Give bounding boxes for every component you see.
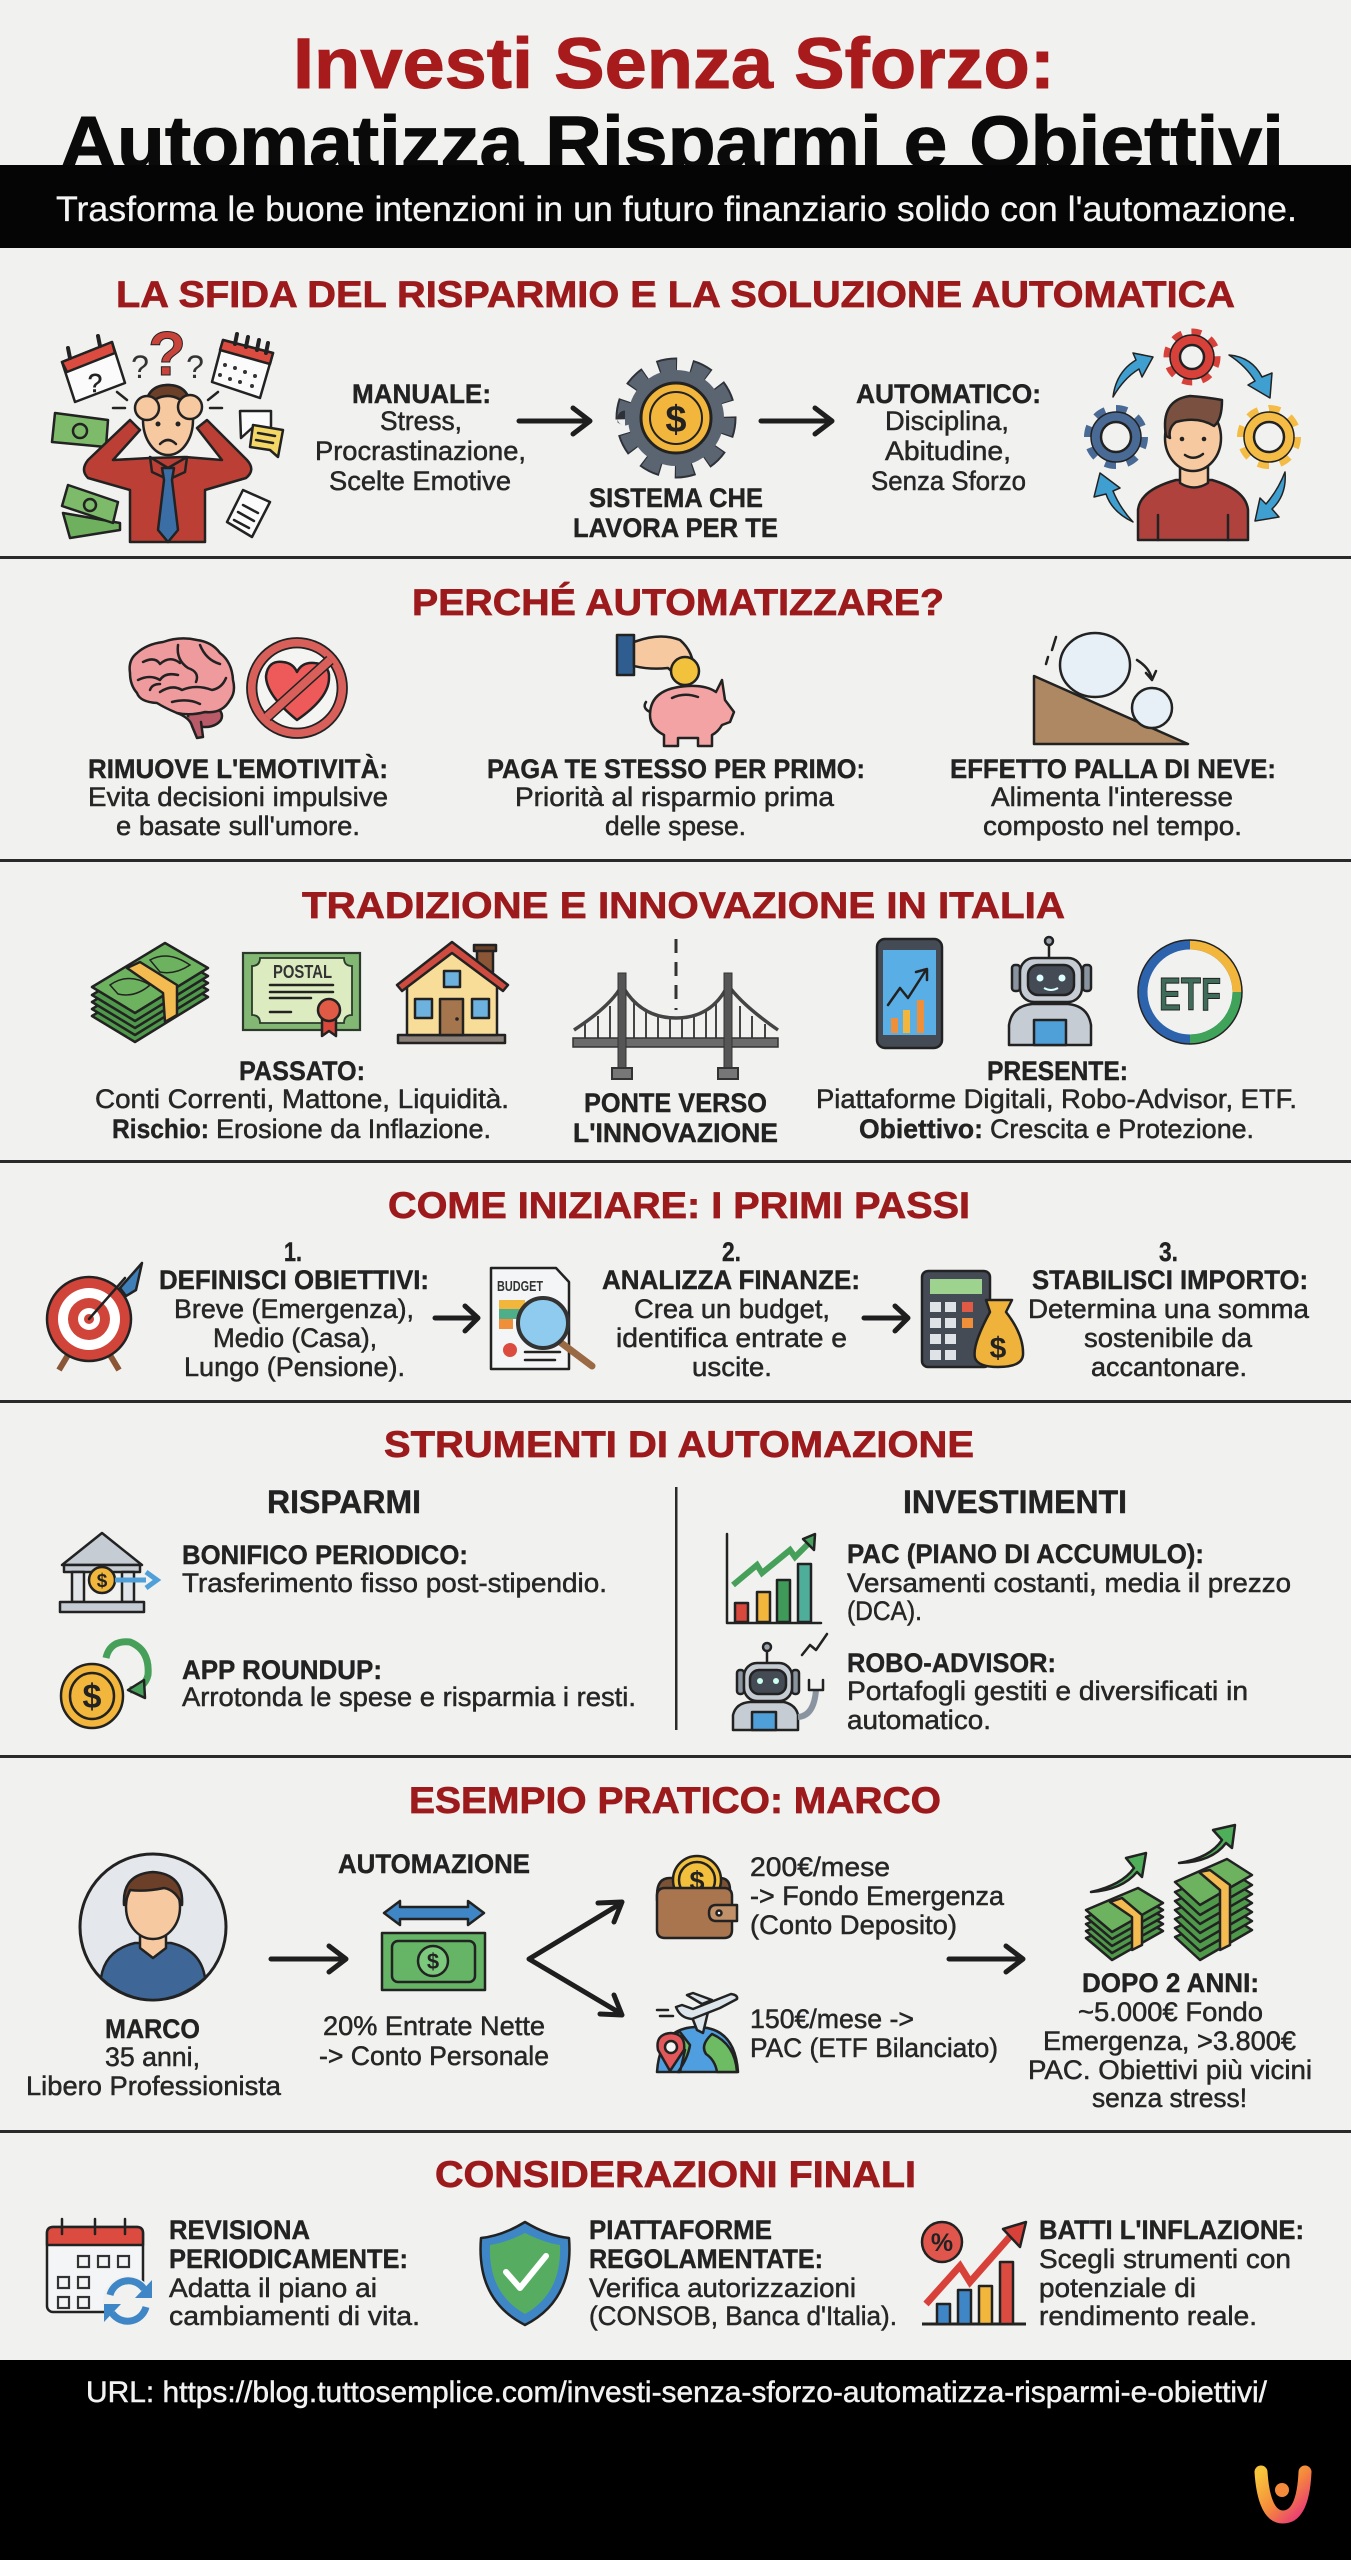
text: pac: (DCA). xyxy=(847,1596,922,1626)
icon: calculator and money bag: $ xyxy=(990,1332,1007,1365)
icon: target xyxy=(47,1263,142,1370)
text: robo-advisor: Portafogli gestiti e diversificati in xyxy=(847,1676,1248,1706)
text: bonifico: BONIFICO PERIODICO: xyxy=(182,1540,468,1570)
text: step 1 xyxy=(159,1237,429,1382)
text: piattaforme: PIATTAFORME xyxy=(589,2215,772,2245)
icon: hand and piggy xyxy=(617,635,734,746)
icon: ETF ring xyxy=(1138,940,1242,1044)
text: ponte xyxy=(573,1088,778,1148)
arrow: fork xyxy=(529,1902,622,2015)
icon: shield xyxy=(481,2222,569,2325)
text: manuale: Scelte Emotive xyxy=(329,466,511,496)
text: step 3 xyxy=(1028,1237,1310,1382)
text: dopo 2 anni: PAC. Obiettivi più vicini xyxy=(1028,2055,1312,2085)
text: pac: PAC (PIANO DI ACCUMULO): xyxy=(847,1539,1204,1569)
icon: postal certificate xyxy=(243,953,360,1036)
icon: marco avatar xyxy=(80,1854,226,2000)
text: step 2: ANALIZZA FINANZE: xyxy=(602,1265,860,1295)
icon: calendar with sync xyxy=(47,2219,153,2326)
text: rimuove: RIMUOVE L'EMOTIVITÀ: xyxy=(88,753,388,784)
panel: perche automatizzare xyxy=(88,582,1276,841)
text: step 1: Medio (Casa), xyxy=(213,1323,377,1353)
icon: stressed man: ? xyxy=(88,368,102,398)
text: passato: PASSATO: xyxy=(239,1056,365,1086)
text: robo-advisor: automatico. xyxy=(847,1705,991,1735)
icon: money stack xyxy=(92,943,208,1042)
text: dopo 2 anni: Emergenza, >3.800€ xyxy=(1043,2026,1296,2056)
panel: la sfida xyxy=(52,274,1297,543)
text: step 2 xyxy=(602,1237,860,1382)
text: automatico: AUTOMATICO: xyxy=(856,379,1041,409)
text: effetto: EFFETTO PALLA DI NEVE: xyxy=(950,754,1276,784)
icon: phone xyxy=(877,939,942,1048)
heading: ESEMPIO PRATICO: MARCO xyxy=(409,1780,941,1821)
text: automatico: Abitudine, xyxy=(885,436,1011,466)
text: marco: MARCO xyxy=(105,2014,200,2044)
text: revisiona xyxy=(169,2215,420,2331)
text: pac xyxy=(847,1539,1291,1626)
text: step 3: STABILISCI IMPORTO: xyxy=(1032,1265,1308,1295)
text: 200: (Conto Deposito) xyxy=(750,1910,957,1940)
text: dopo 2 anni: DOPO 2 ANNI: xyxy=(1082,1968,1259,1998)
text: step 2: uscite. xyxy=(692,1352,772,1382)
icon: stressed man: ? xyxy=(148,320,186,389)
panel: come iniziare xyxy=(47,1185,1310,1382)
text: entrate xyxy=(319,2011,549,2071)
text: batti inflazione: Scegli strumenti con xyxy=(1039,2244,1291,2274)
icon: budget document: BUDGET xyxy=(497,1278,543,1295)
heading: risparmi: RISPARMI xyxy=(267,1484,421,1520)
text: manuale: Stress, xyxy=(380,406,462,436)
subtitle band xyxy=(0,165,1351,248)
icon: gear with coin xyxy=(624,366,728,470)
text: 200 xyxy=(750,1852,1005,1940)
text: batti inflazione: potenziale di xyxy=(1039,2273,1196,2303)
text: revisiona: Adatta il piano ai xyxy=(169,2273,377,2303)
text: entrate: -> Conto Personale xyxy=(319,2041,549,2071)
text: presente xyxy=(816,1056,1297,1144)
text: batti inflazione xyxy=(1039,2215,1304,2331)
text: passato: Conti Correnti, Mattone, Liquidità. xyxy=(95,1084,509,1114)
text: automatico: Disciplina, xyxy=(885,406,1009,436)
icon: wallet: $ xyxy=(689,1866,705,1896)
divider xyxy=(0,1755,1351,1758)
text: marco xyxy=(26,2014,282,2101)
text: revisiona: REVISIONA xyxy=(169,2215,310,2245)
icon: bank xyxy=(60,1533,157,1612)
text: revisiona: cambiamenti di vita. xyxy=(169,2301,420,2331)
icon: postal certificate: POSTAL xyxy=(273,962,332,982)
text: automatico: Senza Sforzo xyxy=(871,466,1026,496)
text: step 3: accantonare. xyxy=(1091,1352,1247,1382)
text: sistema: SISTEMA CHE xyxy=(589,483,763,513)
arrow xyxy=(761,408,832,434)
text: effetto xyxy=(950,754,1276,841)
text: effetto: Alimenta l'interesse xyxy=(991,782,1233,812)
text: manuale xyxy=(315,379,526,496)
icon: bridge xyxy=(573,939,778,1079)
divider xyxy=(0,556,1351,559)
title: Investi Senza Sforzo: xyxy=(293,25,1055,104)
text: passato: Erosione da Inflazione. xyxy=(216,1114,491,1144)
text: step 3: 3. xyxy=(1159,1237,1178,1267)
divider xyxy=(0,859,1351,862)
subtitle band: Trasforma le buone intenzioni in un futuro finanziario solido con l'automazione. xyxy=(56,190,1297,229)
text: presente: PRESENTE: xyxy=(987,1056,1128,1086)
arrow xyxy=(519,408,590,434)
arrow xyxy=(949,1946,1023,1972)
panel: tradizione e innovazione xyxy=(92,885,1297,1148)
icon: ETF ring: ETF xyxy=(1159,968,1221,1020)
footer url: URL: https://blog.tuttosemplice.com/investi-senza-sforzo-automatizza-risparmi-e-obiettivi/ xyxy=(86,2376,1268,2409)
icon: wallet xyxy=(657,1856,737,1938)
text: manuale: Procrastinazione, xyxy=(315,436,526,466)
panel: esempio pratico xyxy=(26,1780,1312,2113)
text: robo-advisor xyxy=(847,1648,1248,1735)
icon: budget document xyxy=(491,1268,592,1369)
icon: stressed man: ? xyxy=(186,349,204,385)
footer band xyxy=(0,2360,1351,2560)
heading: investimenti: INVESTIMENTI xyxy=(903,1484,1127,1520)
text: automazione: AUTOMAZIONE xyxy=(338,1849,530,1879)
icon: robo advisor xyxy=(733,1634,827,1730)
divider xyxy=(0,2130,1351,2133)
icon: calculator and money bag xyxy=(922,1271,1023,1367)
text: effetto: composto nel tempo. xyxy=(983,811,1242,841)
text: step 3: sostenibile da xyxy=(1084,1323,1253,1353)
text: paga: Priorità al risparmio prima xyxy=(515,782,835,812)
text: dopo 2 anni xyxy=(1028,1968,1312,2113)
text: robo-advisor: ROBO-ADVISOR: xyxy=(847,1648,1056,1678)
icon: robot xyxy=(1009,937,1091,1045)
icon: growth chart xyxy=(727,1534,821,1623)
icon: bank: $ xyxy=(97,1571,108,1592)
arrow xyxy=(271,1946,346,1972)
text: revisiona: PERIODICAMENTE: xyxy=(169,2244,408,2274)
text: piattaforme xyxy=(589,2215,897,2331)
text: step 3: Determina una somma xyxy=(1028,1294,1310,1324)
icon: exchange arrows and banknote: $ xyxy=(427,1949,439,1974)
icon: house xyxy=(397,942,508,1043)
icon: exchange arrows and banknote xyxy=(382,1901,485,1990)
text: manuale: MANUALE: xyxy=(352,379,491,409)
text: piattaforme: (CONSOB, Banca d'Italia). xyxy=(589,2301,897,2331)
text: step 2: Crea un budget, xyxy=(634,1294,830,1324)
text: step 1: DEFINISCI OBIETTIVI: xyxy=(159,1265,429,1295)
heading: LA SFIDA DEL RISPARMIO E LA SOLUZIONE AUTOMATICA xyxy=(116,274,1235,315)
heading: COME INIZIARE: I PRIMI PASSI xyxy=(388,1185,970,1226)
icon: stressed man: ? xyxy=(131,349,149,385)
text: 150: 150€/mese -> xyxy=(750,2004,914,2034)
text: bonifico xyxy=(182,1540,607,1598)
text: 200: 200€/mese xyxy=(750,1852,890,1882)
text: ponte: PONTE VERSO xyxy=(584,1088,767,1118)
text: sistema xyxy=(573,483,778,543)
text: app roundup: APP ROUNDUP: xyxy=(182,1655,382,1685)
text: automatico xyxy=(856,379,1041,496)
text: dopo 2 anni: senza stress! xyxy=(1092,2083,1247,2113)
text: ponte: L'INNOVAZIONE xyxy=(573,1118,778,1148)
text: batti inflazione: rendimento reale. xyxy=(1039,2301,1257,2331)
icon: inflation chart xyxy=(922,2222,1026,2324)
text: piattaforme: REGOLAMENTATE: xyxy=(589,2244,823,2274)
text: piattaforme: Verifica autorizzazioni xyxy=(589,2273,856,2303)
text: 200: -> Fondo Emergenza xyxy=(750,1881,1005,1911)
heading: PERCHÉ AUTOMATIZZARE? xyxy=(412,582,944,623)
text: paga: PAGA TE STESSO PER PRIMO: xyxy=(487,754,865,784)
text: dopo 2 anni: ~5.000€ Fondo xyxy=(1078,1997,1263,2027)
text: 150 xyxy=(750,2004,998,2063)
text: presente: Piattaforme Digitali, Robo-Advisor, ETF. xyxy=(816,1084,1297,1114)
heading: STRUMENTI DI AUTOMAZIONE xyxy=(384,1424,974,1465)
text: paga: delle spese. xyxy=(605,811,746,841)
icon: gear with coin: $ xyxy=(665,399,687,441)
text: presente: Crescita e Protezione. xyxy=(990,1114,1254,1144)
text: app roundup: Arrotonda le spese e risparmia i resti. xyxy=(182,1682,636,1712)
divider xyxy=(0,1160,1351,1163)
arrow xyxy=(435,1306,478,1331)
icon: globe and plane xyxy=(657,1993,738,2072)
text: 150: PAC (ETF Bilanciato) xyxy=(750,2033,998,2063)
text: step 1: 1. xyxy=(284,1237,302,1267)
panel: strumenti di automazione xyxy=(60,1424,1291,1735)
title xyxy=(60,25,1284,184)
text: step 2: identifica entrate e xyxy=(616,1323,847,1353)
logo xyxy=(1261,2472,1305,2517)
text: batti inflazione: BATTI L'INFLAZIONE: xyxy=(1039,2215,1304,2245)
text: passato: Rischio: xyxy=(112,1114,209,1144)
arrow xyxy=(864,1306,908,1331)
icon: inflation chart: % xyxy=(931,2229,953,2257)
text: entrate: 20% Entrate Nette xyxy=(323,2011,545,2041)
icon: brain and no heart xyxy=(130,638,347,738)
title: Automatizza Risparmi e Obiettivi xyxy=(60,101,1284,184)
divider xyxy=(0,1400,1351,1403)
icon: stressed man xyxy=(52,320,283,542)
panel: considerazioni finali xyxy=(47,2154,1304,2331)
text: step 1: Breve (Emergenza), xyxy=(174,1294,414,1324)
icon: coin with arrow: $ xyxy=(83,1678,102,1716)
text: paga xyxy=(487,754,865,841)
icon: growing money stacks xyxy=(1086,1825,1252,1960)
text: bonifico: Trasferimento fisso post-stipendio. xyxy=(182,1568,607,1598)
text: passato xyxy=(95,1056,509,1144)
text: pac: Versamenti costanti, media il prezzo xyxy=(847,1568,1291,1598)
text: step 1: Lungo (Pensione). xyxy=(184,1352,405,1382)
icon: snowball xyxy=(1034,633,1188,744)
text: marco: Libero Professionista xyxy=(26,2071,282,2101)
text: app roundup xyxy=(182,1655,636,1712)
text: rimuove xyxy=(88,753,388,841)
icon: person with gears xyxy=(1088,332,1297,540)
text: rimuove: e basate sull'umore. xyxy=(116,811,360,841)
text: presente: Obiettivo: xyxy=(859,1114,983,1144)
icon: coin with arrow xyxy=(61,1642,148,1728)
text: marco: 35 anni, xyxy=(105,2042,200,2072)
text: rimuove: Evita decisioni impulsive xyxy=(88,782,388,812)
text: step 2: 2. xyxy=(722,1237,741,1267)
heading: TRADIZIONE E INNOVAZIONE IN ITALIA xyxy=(302,885,1065,926)
heading: CONSIDERAZIONI FINALI xyxy=(435,2154,916,2195)
text: sistema: LAVORA PER TE xyxy=(573,513,778,543)
